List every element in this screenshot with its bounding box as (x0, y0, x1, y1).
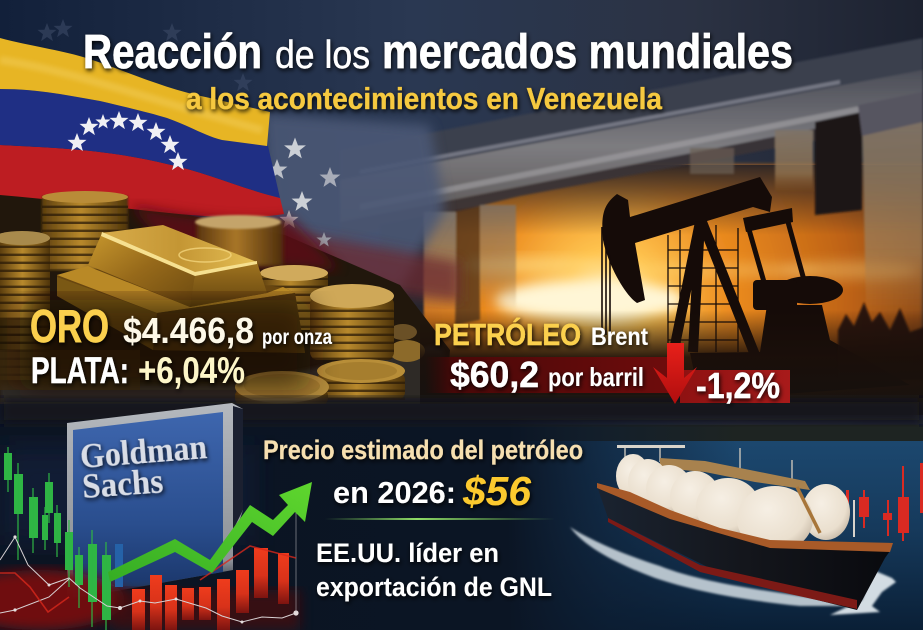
scaffolding (668, 225, 738, 352)
forecast text: Precio estimado del petróleo (263, 435, 583, 465)
oil price ribbon: -1,2% (696, 365, 780, 406)
oil label: PETRÓLEO (434, 316, 581, 352)
hull (597, 486, 890, 610)
gold price label (30, 300, 332, 352)
treeline silhouette (838, 302, 923, 380)
icon: red down arrow (653, 343, 697, 404)
oil price ribbon: $60,2 (450, 354, 539, 395)
dark fade behind gold labels (20, 300, 310, 390)
orange deck (597, 483, 893, 552)
Goldman Sachs sign: Sachs (81, 461, 164, 506)
coins: stacks in front (0, 284, 425, 406)
title (83, 26, 793, 79)
subtitle: a los acontecimientos en Venezuela (186, 81, 663, 116)
flag: Venezuela (0, 38, 340, 270)
red boot stripe (608, 518, 857, 609)
white line chart (0, 537, 296, 622)
LNG export text (316, 538, 552, 602)
pitman arms (748, 222, 804, 282)
LNG export text: EE.UU. líder en (316, 538, 499, 568)
gold bars (57, 225, 305, 353)
superstructure and masts (625, 448, 792, 482)
lower panel: sea and dark background (0, 398, 923, 630)
background: government building with columns (340, 38, 923, 340)
flag: United States fragment (262, 112, 460, 302)
forecast text: en 2026: (333, 475, 456, 510)
horsehead and walking beam (602, 177, 772, 303)
counterweight and gearbox (777, 276, 843, 304)
red candlesticks (132, 548, 289, 630)
green rising arrow (108, 482, 312, 582)
divider (325, 518, 555, 520)
oil price ribbon (425, 343, 790, 406)
oil price ribbon: por barril (548, 362, 644, 392)
gold price label: ORO (30, 300, 109, 352)
background: sunset sky (400, 165, 923, 405)
title: mercados mundiales (382, 26, 793, 79)
silver price label: +6,04% (138, 350, 245, 391)
well cables (602, 227, 610, 335)
green candlesticks (4, 453, 111, 620)
LNG export text: exportación de GNL (316, 572, 552, 602)
gold price label: $4.466,8 (123, 310, 254, 351)
deck structure behind domes (660, 458, 810, 490)
background: speckled grey table (0, 345, 470, 420)
title: de los (275, 34, 370, 77)
Goldman Sachs sign (67, 403, 243, 600)
forecast text (263, 435, 583, 514)
icon: flag stars (68, 111, 188, 170)
coins: stacks behind gold bar (0, 191, 328, 380)
LNG ship wake (570, 527, 896, 615)
samson post (675, 222, 755, 355)
oil pump jack silhouette (602, 177, 910, 400)
ground dark band under pump jack (420, 310, 923, 415)
silver price label (31, 350, 245, 391)
chart: candlesticks and line chart (0, 447, 300, 630)
right edge red candles (846, 463, 923, 541)
silver price label: PLATA: (31, 350, 129, 391)
background: dark ground beneath gold (0, 190, 450, 420)
Goldman Sachs sign: Goldman (79, 427, 208, 476)
title: Reacción (83, 26, 262, 79)
LNG tanker ship (597, 445, 893, 610)
gold price label: por onza (262, 326, 332, 349)
deck pipe (797, 487, 820, 533)
forecast text: $56 (462, 468, 532, 514)
LNG domes (616, 454, 850, 552)
oil label: Brent (591, 323, 649, 351)
background: faint stars upper left (38, 19, 252, 91)
